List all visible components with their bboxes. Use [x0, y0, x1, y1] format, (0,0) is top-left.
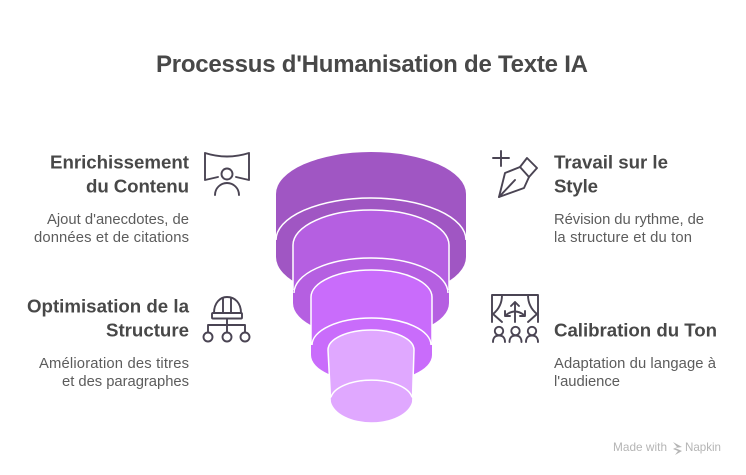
heading	[554, 152, 668, 196]
description	[554, 212, 704, 246]
description: données et de citations	[34, 230, 189, 246]
heading: du Contenu	[86, 176, 189, 196]
description: Ajout d'anecdotes, de	[47, 212, 189, 228]
tier 2	[293, 210, 449, 338]
watermark: Made with	[613, 440, 667, 454]
panel: travail sur le style	[493, 151, 704, 246]
description: l'audience	[554, 374, 620, 390]
title: Processus d'Humanisation de Texte IA	[156, 51, 588, 78]
panel: optimisation de la structure	[27, 296, 250, 390]
heading: Style	[554, 176, 598, 196]
icon: person in front of screen	[205, 153, 249, 195]
heading: Travail sur le	[554, 152, 668, 172]
heading: Calibration du Ton	[554, 320, 717, 340]
tier 3	[311, 270, 432, 382]
icon: stage and audience	[492, 295, 538, 342]
watermark: Napkin	[685, 441, 721, 454]
funnel chart	[276, 152, 466, 422]
heading	[27, 296, 190, 340]
description: et des paragraphes	[62, 374, 189, 390]
description: Révision du rythme, de	[554, 212, 704, 228]
heading: Enrichissement	[50, 152, 189, 172]
tier 4	[328, 330, 414, 422]
heading: Optimisation de la	[27, 296, 190, 316]
watermark	[613, 440, 721, 455]
description	[39, 356, 189, 390]
panel: calibration du ton	[492, 295, 717, 390]
description	[34, 212, 189, 246]
description: la structure et du ton	[554, 230, 692, 246]
heading: Structure	[106, 320, 189, 340]
description: Amélioration des titres	[39, 356, 189, 372]
icon: pen nib with plus	[493, 151, 537, 197]
panel: enrichissement du contenu	[34, 152, 249, 246]
icon: helmet and hierarchy	[204, 297, 250, 342]
description	[554, 356, 717, 390]
heading	[50, 152, 189, 196]
tier 1	[276, 152, 466, 299]
description: Adaptation du langage à	[554, 356, 717, 372]
